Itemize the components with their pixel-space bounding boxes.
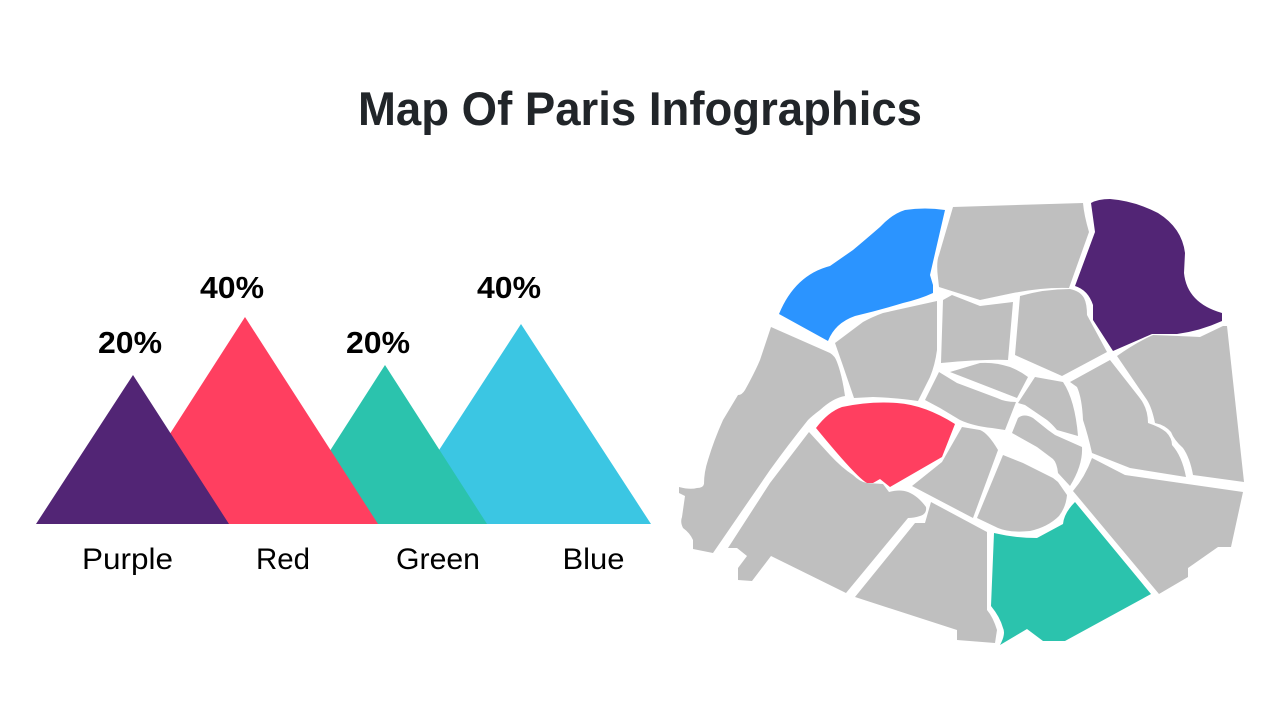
label: Purple: Purple [82,543,173,576]
district: north [937,203,1089,300]
district: centre D [1012,416,1082,486]
district: east inner [1070,360,1186,477]
district: centre F [977,455,1067,532]
value: blue 40%: 40% [477,270,541,305]
district: centre C [1018,377,1078,436]
value: green 20%: 20% [346,325,410,360]
district: inner top right [1015,289,1107,376]
district: inner top left [941,295,1013,363]
triangle: purple [36,375,229,524]
district: centre B [925,372,1016,430]
district: purple highlighted [1075,199,1222,351]
district: southwest large [728,432,926,593]
district: southeast [1073,458,1243,594]
district: centre A [950,363,1028,398]
triangle chart [36,270,651,576]
district: blue highlighted [779,208,945,341]
title: Map Of Paris Infographics [358,82,922,135]
label: Red: Red [256,543,310,576]
district: centre E [912,427,998,518]
district: west [679,327,845,553]
value: purple 20%: 20% [98,325,162,360]
triangle: blue [391,324,651,524]
value: red 40%: 40% [200,270,264,305]
district: inner northwest [835,301,937,401]
triangle: green [283,365,487,524]
triangle: red [112,317,378,524]
district: south [855,502,997,643]
district: red highlighted [816,402,955,487]
label: Blue: Blue [562,543,624,576]
label: Green: Green [396,543,480,576]
district: green highlighted [991,502,1151,645]
map of Paris [679,199,1244,645]
district: east [1117,326,1244,482]
